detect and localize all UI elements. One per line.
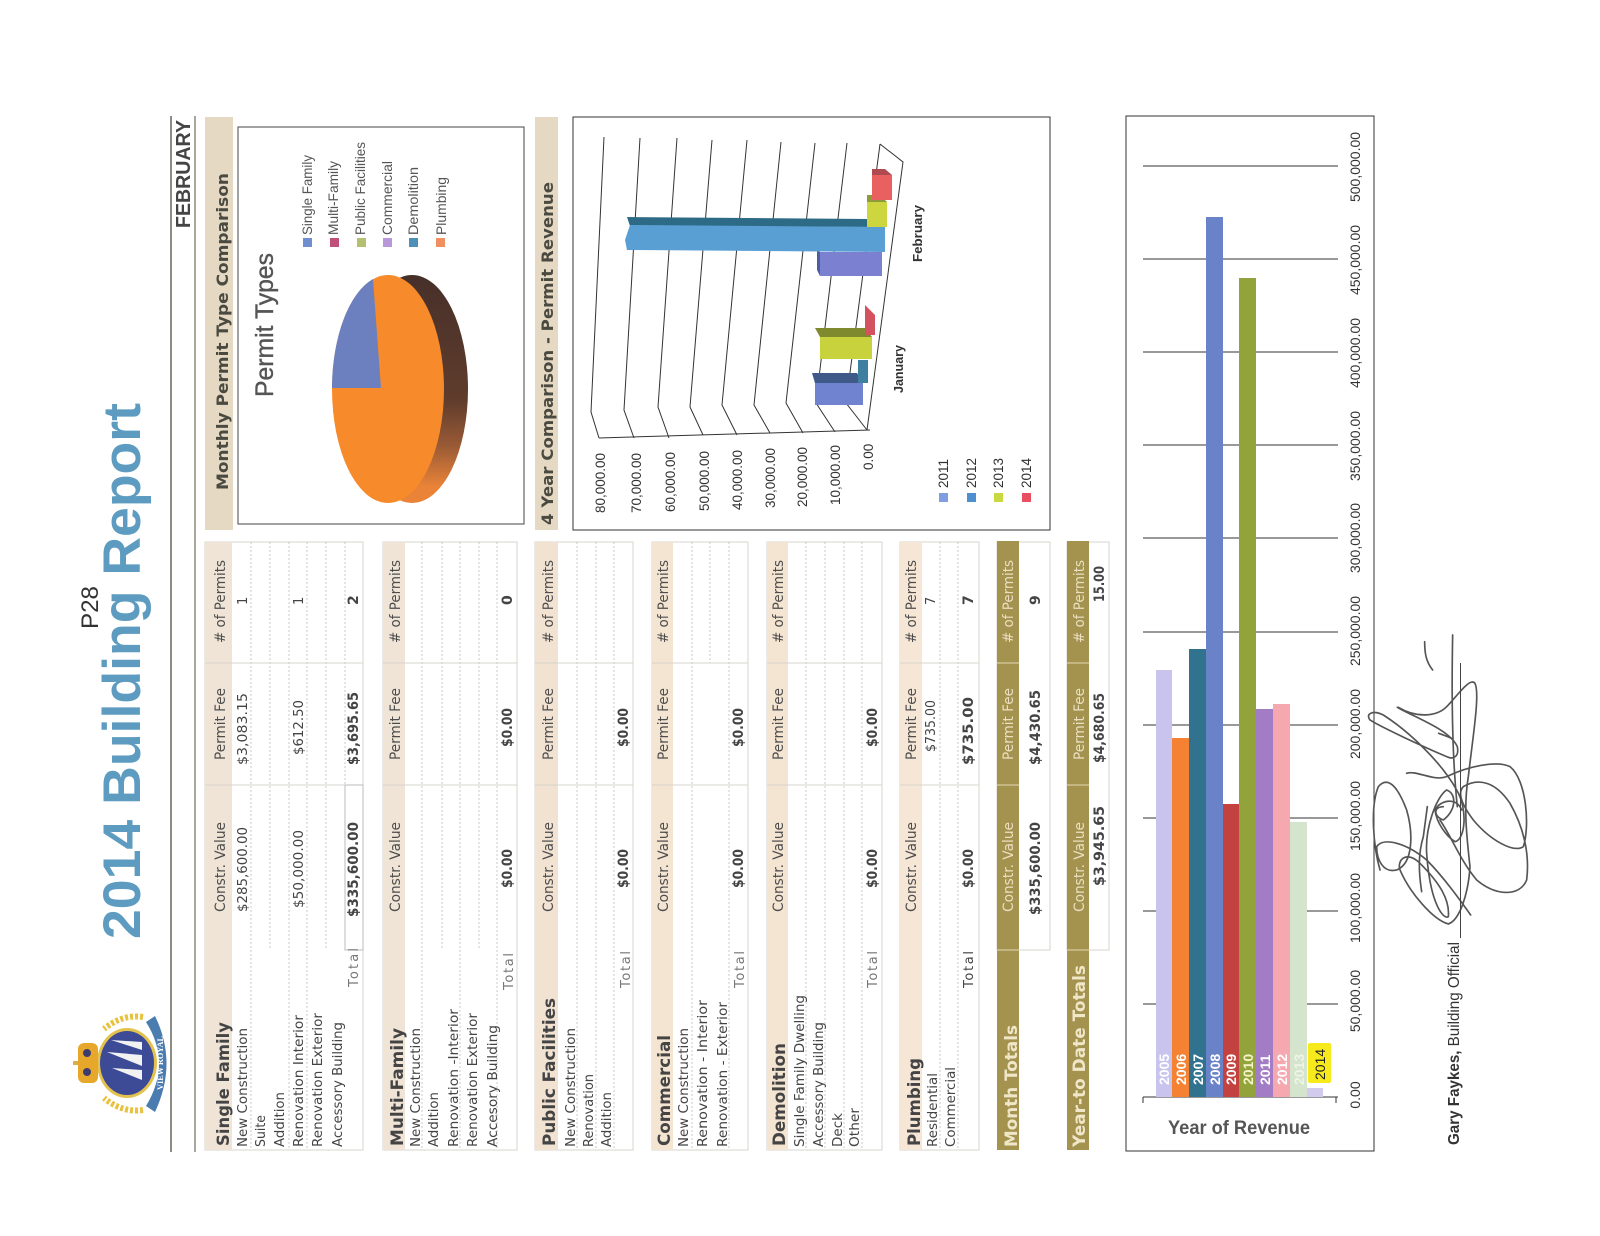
- totals: $335,600.00: [1028, 822, 1044, 915]
- column headers: Permit Fee: [213, 688, 229, 760]
- signature line: [1460, 663, 1461, 938]
- row labels: Renovation - Interior: [696, 999, 711, 1147]
- totals: $0.00: [616, 849, 632, 888]
- column headers: # of Permits: [213, 560, 229, 643]
- value axis labels: 0.00: [861, 444, 876, 470]
- year labels: [1156, 1054, 1307, 1085]
- panel: year-to-date totals: [1067, 541, 1109, 1150]
- column headers: # of Permits: [904, 560, 920, 643]
- row values: $0.00: [961, 849, 977, 888]
- heading: year-to-date totals: Year-to Date Totals: [1070, 965, 1090, 1148]
- header rules: [170, 116, 196, 1152]
- highlighted year 2014: [1308, 1043, 1331, 1083]
- column headers: # of Permits: [1001, 560, 1017, 643]
- totals: $0.00: [500, 708, 516, 747]
- pie: [332, 275, 468, 503]
- column headers: # of Permits: [771, 560, 787, 643]
- row values: $285,600.00: [236, 827, 251, 912]
- value axis labels: 50,000.00: [697, 451, 712, 511]
- legend: Commercial: [379, 161, 395, 235]
- panel: permit types pie chart: [238, 127, 524, 524]
- category labels: [892, 205, 925, 393]
- value axis labels: 70,000.00: [629, 453, 644, 513]
- column headers: Permit Fee: [771, 688, 787, 760]
- signature: [1369, 635, 1527, 924]
- row values: [236, 595, 362, 917]
- row labels: New Construction: [564, 1028, 579, 1147]
- column headers: Permit Fee: [541, 688, 557, 760]
- row labels: [793, 951, 881, 1147]
- bars: February: [625, 169, 892, 276]
- totals: $4,430.65: [1028, 690, 1044, 765]
- value axis labels: 40,000.00: [730, 450, 745, 510]
- row labels: Total: [502, 953, 517, 991]
- totals: [1028, 595, 1044, 915]
- row values: $50,000.00: [292, 830, 307, 908]
- highlighted year 2014: 2014: [1312, 1049, 1328, 1080]
- column headers: [1001, 560, 1017, 912]
- row labels: [926, 951, 977, 1147]
- row values: $3,083.15: [236, 693, 251, 765]
- totals: $0.00: [731, 849, 747, 888]
- row values: $3,695.65: [346, 692, 362, 765]
- row values: 2: [346, 595, 362, 605]
- panel: single family table: [205, 542, 363, 1150]
- row values: 1: [292, 597, 307, 605]
- totals: [616, 708, 632, 888]
- title: 2014 Building Report: [93, 403, 152, 939]
- row labels: [677, 951, 748, 1147]
- column headers: Constr. Value: [904, 822, 920, 912]
- legend: 2012: [964, 458, 979, 488]
- row values: 7: [961, 595, 977, 605]
- value axis labels: 250,000.00: [1347, 596, 1363, 666]
- row values: 1: [236, 597, 251, 605]
- column headers: Constr. Value: [656, 822, 672, 912]
- legend: Plumbing: [433, 177, 449, 235]
- row labels: Renovation Exterior: [311, 1012, 326, 1147]
- row labels: Accessory Building: [812, 1022, 827, 1147]
- column headers: Constr. Value: [771, 822, 787, 912]
- legend: 2013: [991, 458, 1006, 488]
- column headers: Permit Fee: [656, 688, 672, 760]
- category labels: January: [892, 345, 906, 393]
- row labels: [236, 948, 362, 1147]
- row labels: Renovation Interior: [292, 1014, 307, 1147]
- year labels: 2006: [1173, 1054, 1189, 1085]
- logo: View Royal crest: [73, 1016, 166, 1112]
- heading: demolition: Demolition: [770, 1043, 790, 1146]
- year labels: 2007: [1190, 1054, 1206, 1085]
- legend: Public Facilities: [352, 142, 368, 235]
- row labels: Total: [962, 951, 977, 989]
- legend: Single Family: [299, 155, 315, 235]
- column headers: Permit Fee: [1001, 688, 1017, 760]
- column headers: Permit Fee: [904, 688, 920, 760]
- logo: View Royal crest: VIEW ROYAL: [156, 1036, 165, 1090]
- bars: January: [812, 305, 875, 405]
- value axis labels: 100,000.00: [1347, 873, 1363, 943]
- row labels: Suite: [254, 1115, 269, 1147]
- totals: $0.00: [731, 708, 747, 747]
- totals: 15.00: [1092, 566, 1108, 602]
- totals: [500, 595, 516, 888]
- totals: [731, 708, 747, 888]
- totals: [865, 708, 881, 888]
- signatory name: Gary Faykes, Building Official: [1446, 942, 1463, 1145]
- row values: $612.50: [292, 700, 307, 755]
- row values: 7: [924, 597, 939, 605]
- column headers: # of Permits: [1072, 560, 1088, 643]
- row labels: Total: [347, 948, 362, 988]
- legend: Multi-Family: [325, 161, 341, 235]
- totals: $0.00: [865, 708, 881, 747]
- column headers: [904, 560, 920, 912]
- column headers: [771, 560, 787, 912]
- value axis labels: 450,000.00: [1347, 225, 1363, 295]
- row labels: [409, 953, 517, 1147]
- column headers: # of Permits: [541, 560, 557, 643]
- panel: 4 year comparison 3D bar chart: [573, 117, 1050, 530]
- category labels: February: [911, 205, 925, 262]
- row values: $735.00: [924, 700, 939, 752]
- row labels: Accesory Building: [486, 1025, 501, 1147]
- row labels: Addition: [427, 1092, 442, 1147]
- row labels: Total: [733, 951, 748, 989]
- row labels: Total: [866, 951, 881, 989]
- heading band: monthly permit type comparison: Monthly Permit Type Comparison: [213, 173, 232, 490]
- heading: plumbing: Plumbing: [905, 1058, 925, 1146]
- panel: public facilities table: [535, 542, 634, 1150]
- row labels: New Construction: [409, 1028, 424, 1147]
- column headers: Constr. Value: [1072, 822, 1088, 912]
- column headers: Permit Fee: [388, 688, 404, 760]
- value axis labels: 300,000.00: [1347, 503, 1363, 573]
- legend: Demolition: [405, 167, 421, 235]
- legend: [936, 457, 1034, 502]
- column headers: [213, 560, 229, 912]
- totals: $0.00: [616, 708, 632, 747]
- column headers: [656, 560, 672, 912]
- year labels: 2005: [1156, 1054, 1172, 1085]
- column headers: Constr. Value: [388, 822, 404, 912]
- row labels: Total: [619, 951, 634, 989]
- row values: $335,600.00: [346, 822, 362, 917]
- row labels: Renovation Exterior: [466, 1012, 481, 1147]
- totals: $0.00: [500, 849, 516, 888]
- bars: [1156, 217, 1323, 1097]
- heading band: monthly permit type comparison: [205, 117, 233, 530]
- column headers: # of Permits: [656, 560, 672, 643]
- value axis labels: 80,000.00: [593, 453, 608, 513]
- chart title: Year of Revenue: [1168, 1118, 1310, 1139]
- row labels: Renovation - Exterior: [716, 1001, 731, 1147]
- year labels: 2009: [1223, 1054, 1239, 1085]
- totals: [1092, 566, 1108, 886]
- row labels: [564, 951, 634, 1147]
- month label: FEBRUARY: [173, 119, 195, 228]
- year labels: 2010: [1240, 1054, 1256, 1085]
- row labels: Renovation -Interior: [447, 1008, 462, 1147]
- heading: multi-family: Multi-Family: [388, 1028, 408, 1146]
- row labels: Other: [848, 1107, 863, 1147]
- value axis labels: 0.00: [1347, 1081, 1363, 1109]
- panel: demolition table: [767, 542, 882, 1150]
- legend: [299, 142, 449, 247]
- panel: year of revenue bar chart: [1126, 116, 1374, 1151]
- grid: [1143, 166, 1338, 1103]
- legend: 2014: [1019, 457, 1034, 488]
- value axis labels: 20,000.00: [795, 447, 810, 507]
- value axis labels: 400,000.00: [1347, 318, 1363, 388]
- totals: $3,945.65: [1092, 806, 1108, 886]
- heading: month totals: Month Totals: [1002, 1025, 1022, 1147]
- grid: [591, 137, 903, 438]
- year labels: 2012: [1274, 1054, 1290, 1085]
- totals: 0: [500, 595, 516, 605]
- value axis labels: [1347, 132, 1363, 1109]
- column headers: [388, 560, 404, 912]
- value axis labels: 60,000.00: [663, 452, 678, 512]
- chart title: Permit Types: [251, 253, 279, 397]
- row labels: New Construction: [677, 1028, 692, 1147]
- value axis labels: 150,000.00: [1347, 781, 1363, 851]
- row labels: Deck: [831, 1113, 846, 1147]
- column headers: Permit Fee: [1072, 688, 1088, 760]
- column headers: Constr. Value: [213, 822, 229, 912]
- heading: single family: Single Family: [214, 1022, 234, 1146]
- value axis labels: 50,000.00: [1347, 970, 1363, 1032]
- value axis labels: 200,000.00: [1347, 689, 1363, 759]
- panel: multi-family table: [383, 542, 517, 1150]
- column headers: [541, 560, 557, 912]
- row labels: Accessory Building: [331, 1022, 346, 1147]
- heading: public facilities: Public Facilities: [540, 998, 560, 1146]
- heading: commercial: Commercial: [655, 1035, 675, 1146]
- column headers: Constr. Value: [1001, 822, 1017, 912]
- heading band: 4 year comparison: 4 Year Comparison - Permit Revenue: [538, 182, 557, 525]
- row labels: Renovation: [582, 1074, 597, 1147]
- row labels: Commercial: [944, 1067, 959, 1147]
- heading band: 4 year comparison: [535, 117, 558, 530]
- column headers: [1072, 560, 1088, 912]
- panel: month totals: [997, 541, 1050, 1150]
- legend: 2011: [936, 459, 951, 488]
- row values: $735.00: [961, 697, 977, 765]
- value axis labels: 500,000.00: [1347, 132, 1363, 202]
- row labels: Single Family Dwelling: [793, 995, 808, 1147]
- value axis labels: 10,000.00: [828, 445, 843, 505]
- value axis labels: 350,000.00: [1347, 411, 1363, 481]
- row labels: New Construction: [236, 1028, 251, 1147]
- totals: 9: [1028, 595, 1044, 605]
- value axis labels: 30,000.00: [763, 448, 778, 508]
- row values: [924, 595, 977, 888]
- totals: $0.00: [865, 849, 881, 888]
- column headers: # of Permits: [388, 560, 404, 643]
- year labels: 2008: [1207, 1054, 1223, 1085]
- year labels: 2011: [1257, 1054, 1273, 1085]
- row labels: Addition: [600, 1092, 615, 1147]
- page reference P28: P28: [77, 586, 104, 629]
- year labels: 2013: [1291, 1054, 1307, 1085]
- panel: commercial table: [652, 542, 748, 1150]
- totals: $4,680.65: [1092, 693, 1108, 763]
- value axis labels: [593, 444, 876, 513]
- row labels: Residential: [926, 1073, 941, 1147]
- column headers: Constr. Value: [541, 822, 557, 912]
- panel: plumbing table: [900, 542, 979, 1150]
- row labels: Addition: [273, 1092, 288, 1147]
